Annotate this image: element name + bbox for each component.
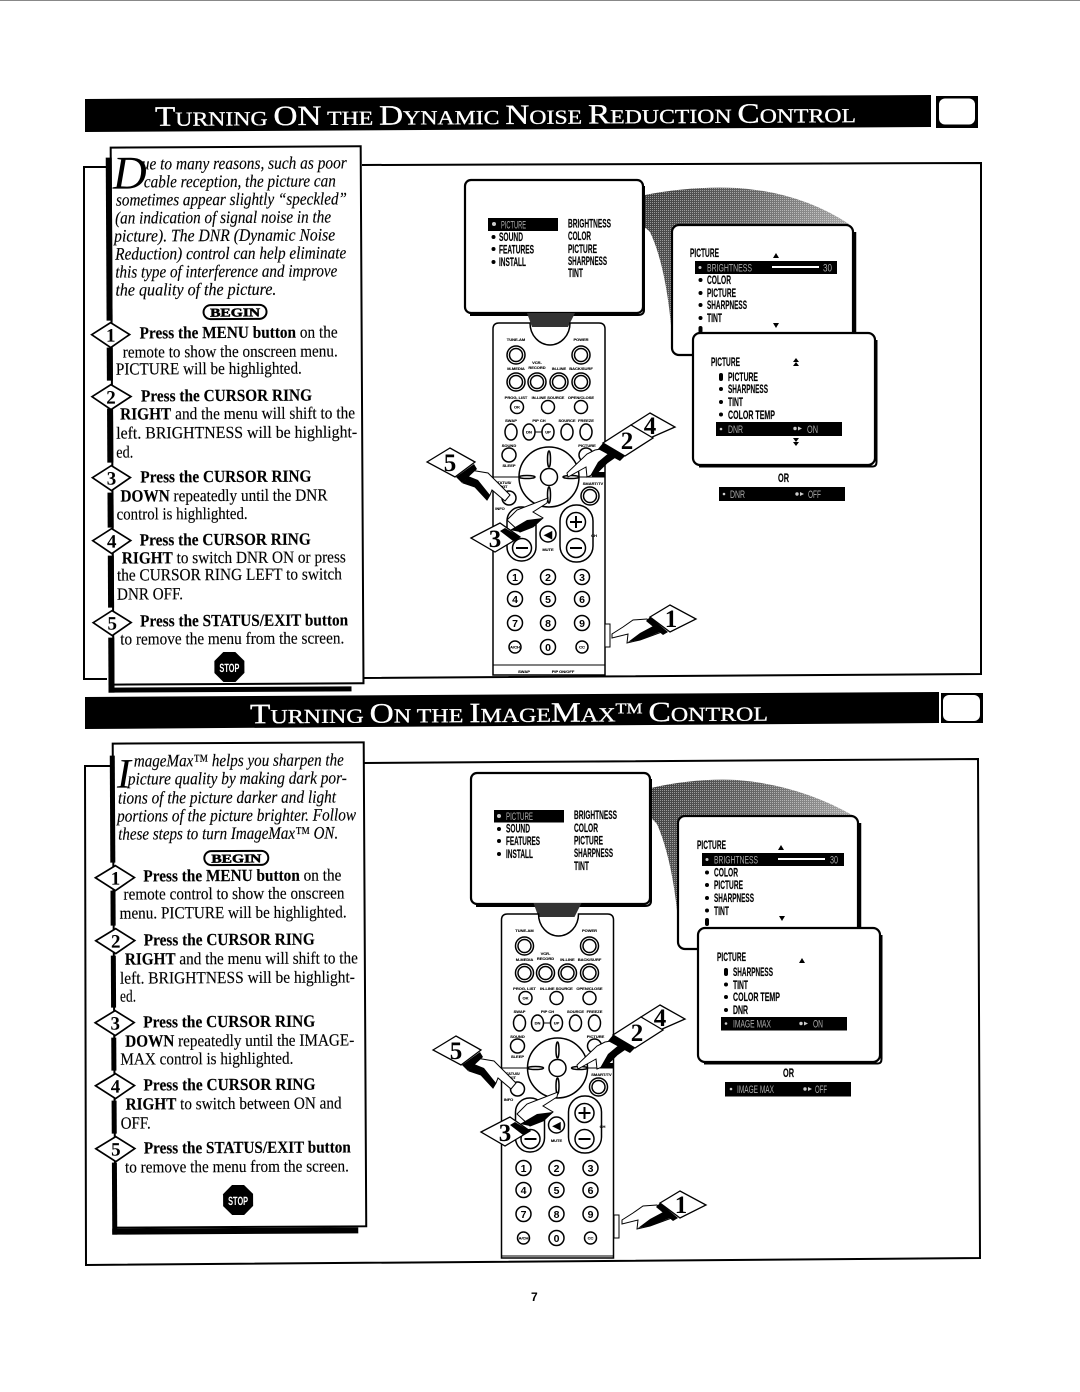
tv menu: dnr setting top: DNR (728, 424, 743, 436)
remote control: top: OK (514, 404, 520, 410)
remote control: top: 5 (545, 594, 551, 606)
remote control: bottom: PICTURE (587, 1034, 605, 1039)
hand pointer: step 3 top: 3 (489, 526, 501, 553)
remote control: top: 8 (545, 618, 551, 630)
step 4: 4 (111, 1077, 121, 1098)
step 1: Press the MENU button on the (140, 322, 338, 342)
remote control: top: IN-LINE SOURCE (532, 395, 565, 400)
icon: stop sign: STOP (219, 661, 239, 675)
hand pointer: steps 2 and 4 bottom: 4 (654, 1005, 667, 1032)
remote control: top: SMART/TV (583, 481, 604, 486)
remote control: bottom: 0 (554, 1233, 560, 1245)
tv menu: main menu top: BRIGHTNESS (568, 218, 611, 230)
step 1: 1 (111, 869, 120, 890)
intro paragraph: tions of the picture darker and light (118, 786, 337, 808)
tv menu: main menu top (465, 180, 644, 315)
remote control: top: 2 (545, 572, 551, 584)
step 5: to remove the menu from the screen. (120, 628, 344, 649)
remote control: bottom: M-MEDIA (516, 957, 533, 962)
tv menu: main menu top: PICTURE (568, 244, 597, 256)
intro paragraph: Reduction) control can help eliminate (114, 242, 346, 264)
remote control: bottom: DN (535, 1020, 540, 1026)
remote control: top: TUNE-AM (507, 337, 526, 342)
intro paragraph: portions of the picture brighter. Follow (115, 804, 356, 826)
tv menu: imagemax setting bottom: PICTURE (717, 952, 746, 964)
hand pointer: step 5 bottom: 5 (450, 1038, 462, 1065)
remote control: bottom: PIP CH (541, 1009, 554, 1014)
step 1 (95, 864, 347, 923)
remote control: bottom: SOURCE (567, 1009, 584, 1014)
step 3: 3 (107, 469, 116, 490)
remote control: top: 4 (512, 594, 518, 606)
heading: dynamic noise reduction: TURNING ON THE DYNAMIC NOISE REDUCTION CONTROL (155, 98, 856, 133)
step 2: 2 (106, 388, 116, 409)
step 1: remote control to show the onscreen (123, 883, 345, 904)
step 3: Press the CURSOR RING (143, 1012, 315, 1031)
hand pointer: step 1 bottom: 1 (675, 1192, 687, 1219)
remote control: bottom: 1 (521, 1163, 527, 1175)
remote control: top: POWER (573, 337, 589, 342)
tv menu: main menu top: INSTALL (499, 257, 526, 269)
remote control: bottom: SWAP (514, 1009, 526, 1014)
step 5: Press the STATUS/EXIT button (144, 1137, 351, 1157)
remote control: top: CC (579, 644, 585, 650)
tv menu: main menu bottom: SOUND (506, 824, 530, 836)
remote control: bottom: CH (600, 1124, 605, 1129)
remote control: top: OPEN/CLOSE (568, 395, 594, 400)
remote control: top (493, 313, 610, 675)
tv menu: imagemax setting bottom (698, 928, 882, 1064)
step 2: left. BRIGHTNESS will be highlight- (120, 967, 355, 988)
remote control: bottom: EXIT (507, 1075, 517, 1080)
tv menu: picture submenu bottom: TINT (714, 906, 729, 918)
remote control: top: INFO (495, 506, 505, 511)
remote control: bottom: A/CH (519, 1236, 528, 1240)
tv menu: picture submenu bottom (678, 816, 860, 949)
remote control: bottom: MUTE (551, 1138, 562, 1143)
begin badge: BEGIN (210, 305, 260, 320)
step 2: left. BRIGHTNESS will be highlight- (116, 422, 358, 443)
intro paragraph: cable reception, the picture can (144, 170, 336, 191)
tv menu: picture submenu top: BRIGHTNESS (707, 262, 752, 274)
frame: bottom section (85, 759, 980, 1265)
step 4 (95, 1072, 342, 1133)
step 3: DOWN repeatedly until the IMAGE- (125, 1030, 355, 1051)
remote control: bottom: BACK/SURF (578, 957, 602, 962)
step 1 (92, 321, 338, 379)
icon: tv screen top (936, 96, 978, 128)
remote control: bottom (502, 903, 619, 1258)
step 3: MAX control is highlighted. (120, 1049, 293, 1069)
step 4: RIGHT to switch between ON and (126, 1093, 342, 1114)
tv menu: main menu top: TINT (568, 268, 583, 280)
remote control: top: SLEEP (502, 463, 516, 468)
tv menu: picture submenu bottom: BRIGHTNESS (714, 854, 758, 866)
step 3: DOWN repeatedly until the DNR (120, 485, 328, 506)
intro paragraph (112, 146, 348, 300)
tv menu: main menu bottom: PICTURE (574, 836, 603, 848)
tv menu: picture submenu bottom: 30 (830, 854, 838, 866)
remote control: top: PROG. LIST (505, 395, 528, 400)
step 2 (96, 927, 358, 1006)
step 3 (95, 1009, 355, 1069)
step 4: the CURSOR RING LEFT to switch (117, 564, 342, 585)
step 1: 1 (106, 326, 115, 347)
tv menu: main menu bottom: SHARPNESS (574, 848, 613, 860)
tv menu: picture submenu top: COLOR (707, 275, 731, 287)
step 5: 5 (111, 1140, 121, 1161)
step 1: Press the MENU button on the (143, 865, 341, 885)
step 4: DNR OFF. (117, 584, 183, 604)
remote control: bottom: SMART/TV (591, 1072, 612, 1077)
step 2: RIGHT and the menu will shift to the (120, 403, 355, 424)
remote control: bottom: 5 (554, 1185, 560, 1197)
remote control: top: 9 (579, 618, 585, 630)
step 4: Press the CURSOR RING (143, 1075, 316, 1094)
tv menu: imagemax setting bottom: TINT (733, 980, 748, 992)
icon: stop sign (223, 1185, 253, 1215)
step 3: 3 (110, 1014, 120, 1035)
remote control: top: 6 (579, 594, 585, 606)
intro paragraph: these steps to turn ImageMax™ ON. (118, 822, 338, 844)
intro paragraph: the quality of the picture. (115, 279, 276, 300)
step 5: Press the STATUS/EXIT button (140, 610, 349, 630)
tv menu: picture submenu top (672, 225, 855, 355)
illustration beam: bottom (623, 780, 858, 945)
tv menu: main menu bottom: TINT (574, 861, 589, 873)
menu bar: imagemax off bottom: IMAGE MAX (737, 1084, 774, 1096)
intro paragraph: picture). The DNR (Dynamic Noise (112, 224, 335, 246)
step 2: ed. (116, 442, 133, 462)
menu bar: dnr off top: OFF (808, 489, 821, 501)
remote control: top: SWAP (518, 669, 530, 674)
remote control: bottom: POWER (582, 928, 597, 933)
tv menu: picture submenu bottom: COLOR (714, 868, 738, 880)
step 3: control is highlighted. (117, 504, 248, 524)
remote control: bottom: INFO (504, 1097, 513, 1102)
step 2: Press the CURSOR RING (141, 386, 312, 405)
tv menu: dnr setting top: TINT (728, 397, 743, 409)
tv menu: picture submenu top: PICTURE (707, 288, 736, 300)
tv menu: dnr setting top: ON (807, 424, 818, 436)
step 2: Press the CURSOR RING (144, 930, 315, 949)
tv menu: picture submenu top: TINT (707, 313, 722, 325)
remote control: top: STATUS/ (495, 480, 512, 485)
intro paragraph (115, 749, 357, 844)
step 4: Press the CURSOR RING (140, 530, 311, 549)
hand pointer: step 5 top (427, 448, 510, 501)
menu bar: dnr off top: DNR (730, 489, 745, 501)
remote control: top: BACK/SURF (569, 366, 593, 371)
step 2: ed. (120, 987, 136, 1006)
intro paragraph: D (112, 147, 147, 200)
remote control: top: VCR- (532, 360, 543, 365)
menu bar: dnr off top (719, 487, 845, 501)
hand pointer: step 1 top: 1 (665, 606, 677, 633)
remote control: bottom: UP (554, 1020, 560, 1026)
tv menu: picture submenu top: 30 (823, 262, 832, 274)
remote control: top: DN (526, 430, 532, 434)
remote control: bottom: 9 (588, 1209, 594, 1221)
remote control: bottom: CC (588, 1236, 593, 1240)
step 5: to remove the menu from the screen. (125, 1156, 349, 1177)
icon: stop sign (214, 652, 244, 682)
tv menu: main menu top: SHARPNESS (568, 256, 607, 268)
remote control: top: SWAP (505, 418, 517, 423)
label: or bottom: OR (783, 1068, 794, 1080)
remote control: top: PIP CH (532, 418, 546, 423)
icon: stop sign: STOP (228, 1194, 248, 1208)
step 1: remote to show the onscreen menu. (123, 341, 338, 362)
tv menu: picture submenu top: PICTURE (690, 248, 719, 260)
remote control: bottom: 8 (554, 1209, 560, 1221)
remote control: bottom: IN-LINE SOURCE (540, 986, 573, 991)
step 3: Press the CURSOR RING (140, 467, 311, 486)
remote control: bottom: STATUS/ (503, 1071, 521, 1076)
menu bar: imagemax off bottom: OFF (815, 1084, 827, 1096)
tv menu: dnr setting top: PICTURE (711, 357, 740, 369)
remote control: bottom: TUNE-AM (515, 928, 534, 933)
remote control: top: IN-LINE (552, 366, 567, 371)
step 1: menu. PICTURE will be highlighted. (120, 902, 347, 923)
intro paragraph: picture quality by making dark por- (126, 767, 347, 789)
tv menu: main menu bottom: FEATURES (506, 836, 540, 848)
intro paragraph: I (116, 752, 133, 798)
frame: top section (84, 163, 981, 679)
remote control: bottom: 4 (521, 1185, 527, 1197)
tv menu: dnr setting top: PICTURE (728, 372, 758, 384)
remote control: top: RECORD (528, 365, 546, 370)
remote control: top: M-MEDIA (507, 366, 525, 371)
remote control: bottom: ◀ (551, 1120, 561, 1132)
tv menu: imagemax setting bottom: DNR (733, 1005, 748, 1017)
tv menu: main menu bottom: INSTALL (506, 849, 533, 861)
remote control: top: EXIT (499, 484, 508, 489)
step 5 (96, 1135, 351, 1177)
heading: imagemax: TM (615, 701, 642, 717)
begin badge (204, 851, 268, 866)
remote control: top: 3 (579, 572, 585, 584)
step 5: 5 (107, 614, 117, 635)
remote control: bottom: OPEN/CLOSE (576, 986, 603, 991)
step 2: RIGHT and the menu will shift to the (125, 948, 358, 969)
begin badge: BEGIN (211, 851, 262, 866)
heading: imagemax (85, 692, 939, 730)
hand pointer: steps 2 and 4 top: 2 (621, 428, 633, 455)
step 4: RIGHT to switch DNR ON or press (122, 547, 346, 568)
begin badge (204, 305, 267, 320)
tv menu: imagemax setting bottom: ON (813, 1018, 823, 1030)
hand pointer: step 3 bottom: 3 (499, 1120, 511, 1147)
heading: imagemax: TURNING ON THE IMAGE MAX (250, 698, 610, 730)
step 5 (93, 609, 349, 649)
remote control: top: SOUND (502, 443, 516, 448)
tv menu: main menu bottom (471, 773, 651, 906)
intro paragraph: mageMax™ helps you sharpen the (134, 749, 344, 771)
remote control: top: SOURCE (558, 418, 576, 423)
remote control: bottom: 2 (554, 1163, 560, 1175)
remote control: top: PICTURE (578, 443, 596, 448)
tv menu: main menu top: FEATURES (499, 244, 534, 256)
remote control: bottom: VCR- (541, 951, 551, 956)
hand pointer: step 1 bottom (622, 1191, 706, 1229)
remote control: top: A/CH (510, 644, 520, 650)
hand pointer: steps 2 and 4 bottom (577, 1005, 685, 1069)
step 2: 2 (111, 932, 121, 953)
intro paragraph: (an indication of signal noise in the (115, 206, 331, 228)
heading: imagemax: CONTROL (648, 697, 752, 728)
tv menu: imagemax setting bottom: COLOR TEMP (733, 992, 780, 1004)
hand pointer: step 1 top (612, 605, 696, 643)
hand pointer: step 3 bottom (481, 1092, 558, 1147)
tv menu: main menu bottom: PICTURE (506, 811, 533, 823)
hand pointer: steps 2 and 4 top: 4 (644, 413, 657, 440)
tv menu: main menu bottom: COLOR (574, 823, 598, 835)
remote control: top: 0 (545, 642, 551, 654)
step 3 (92, 464, 328, 524)
step 4 (93, 527, 346, 604)
remote control: bottom: OK (522, 996, 529, 1000)
remote control: top: CH (591, 533, 597, 538)
remote control: bottom: RECORD (537, 956, 554, 961)
step 1: PICTURE will be highlighted. (116, 359, 302, 379)
remote control: bottom: 3 (588, 1163, 594, 1175)
remote control: top: UP (545, 430, 551, 434)
hand pointer: step 5 top: 5 (444, 450, 456, 477)
intro paragraph: this type of interference and improve (115, 260, 338, 282)
remote control: bottom: SOUND (510, 1034, 525, 1039)
remote control: top: MUTE (542, 547, 554, 552)
remote control: bottom: SLEEP (511, 1054, 524, 1059)
remote control: top: PIP ON/OFF (552, 669, 575, 674)
tv menu: main menu top: SOUND (499, 232, 523, 244)
tv menu: imagemax setting bottom: IMAGE MAX (733, 1018, 771, 1030)
tv menu: picture submenu top: SHARPNESS (707, 300, 747, 312)
hand pointer: steps 2 and 4 top (567, 413, 675, 477)
tv menu: picture submenu bottom: SHARPNESS (714, 893, 754, 905)
tv menu: dnr setting top: SHARPNESS (728, 384, 768, 396)
tv menu: main menu top: COLOR (568, 231, 591, 243)
intro paragraph: sometimes appear slightly “speckled” (116, 188, 347, 210)
tv menu: dnr setting top: COLOR TEMP (728, 410, 775, 422)
remote control: bottom: 6 (588, 1185, 594, 1197)
remote control: bottom: IN-LINE (560, 957, 575, 962)
remote control: bottom: FREEZE (587, 1009, 603, 1014)
panel: imagemax instructions (94, 742, 366, 1235)
step 4: 4 (107, 532, 117, 553)
illustration beam: top (616, 188, 853, 350)
tv menu: picture submenu bottom: PICTURE (714, 880, 743, 892)
intro paragraph: ue to many reasons, such as poor (142, 152, 347, 173)
step 4: OFF. (121, 1113, 151, 1133)
remote control: top: ◀ (543, 529, 553, 541)
step 2 (92, 383, 358, 462)
tv menu: main menu bottom: BRIGHTNESS (574, 810, 617, 822)
tv menu: imagemax setting bottom: SHARPNESS (733, 967, 773, 979)
remote control: top: FREEZE (578, 418, 594, 423)
panel: dynamic noise reduction instructions (91, 146, 364, 693)
remote control: bottom: 7 (521, 1209, 527, 1221)
hand pointer: steps 2 and 4 bottom: 2 (631, 1020, 643, 1047)
tv menu: picture submenu bottom: PICTURE (697, 840, 726, 852)
tv menu: dnr setting top (693, 333, 876, 466)
tv menu: main menu top: PICTURE (501, 220, 526, 232)
remote control: bottom: PROG. LIST (513, 986, 536, 991)
icon: tv screen bottom (941, 693, 983, 723)
hand pointer: step 5 bottom (433, 1036, 516, 1089)
hand pointer: step 3 top (471, 498, 548, 553)
remote control: top: 7 (512, 618, 518, 630)
label: or top: OR (778, 473, 789, 485)
remote control: top: 1 (512, 572, 518, 584)
menu bar: imagemax off bottom (725, 1082, 851, 1096)
page number: 7 (531, 1290, 538, 1304)
